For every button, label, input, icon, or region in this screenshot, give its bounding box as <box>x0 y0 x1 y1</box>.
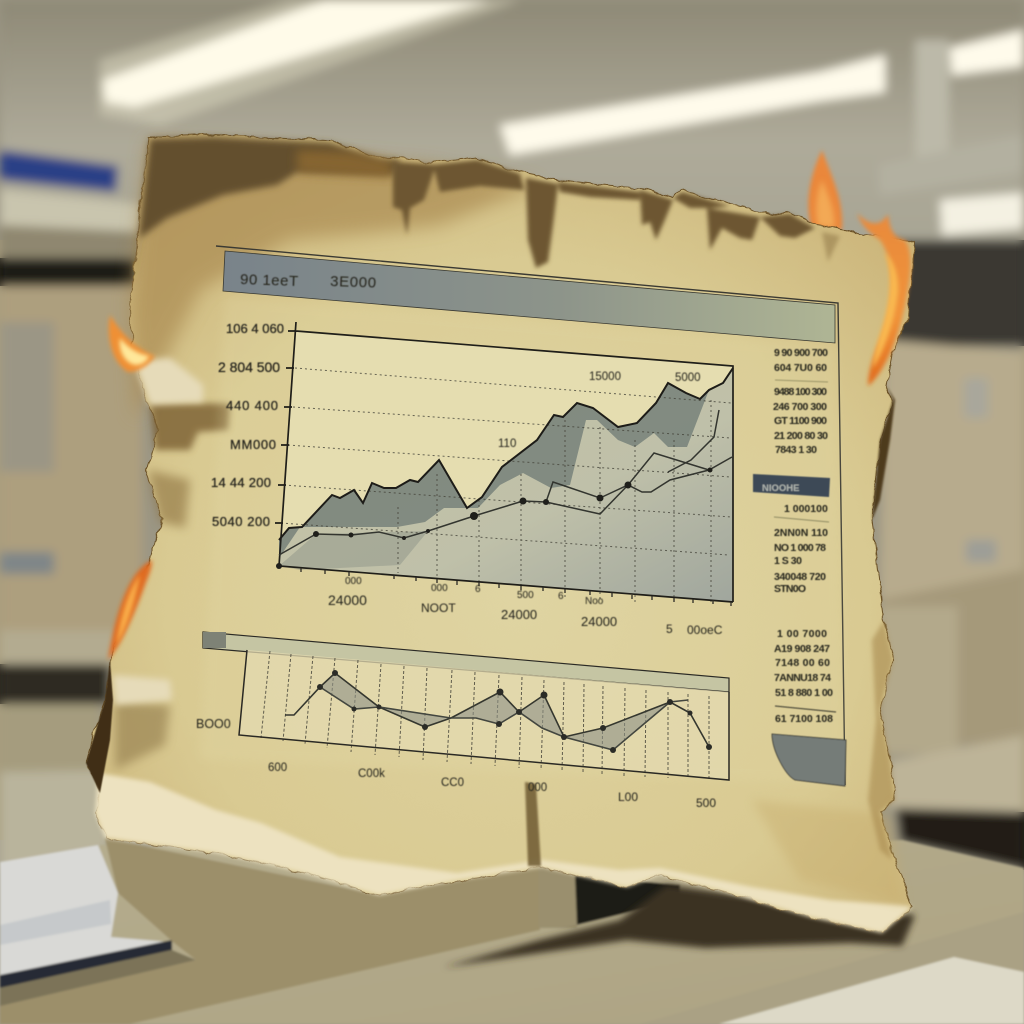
y axis labels: 5040 200 <box>212 514 270 529</box>
right text block 2: STN0O <box>774 583 806 595</box>
right column text <box>753 347 846 786</box>
vertical grid <box>261 651 709 780</box>
flame: right edge <box>857 213 910 386</box>
white worn patch lower left <box>113 675 172 705</box>
y axis labels <box>211 321 284 529</box>
right text block 2: NO 1 000 78 <box>774 542 826 554</box>
plot area fill <box>279 331 733 602</box>
y axis labels: 106 4 060 <box>226 321 284 336</box>
right text block 1: 246 700 300 <box>773 401 827 413</box>
box <box>539 866 577 928</box>
light area <box>279 368 733 602</box>
series lines <box>279 410 732 555</box>
lower dark band <box>279 531 428 570</box>
dark window <box>575 875 680 925</box>
right text block 2 <box>774 503 829 595</box>
right text block 1 <box>773 347 828 456</box>
x axis labels: Noo <box>585 596 604 607</box>
ridge outline <box>279 368 733 540</box>
lower chart labels: 600 <box>268 762 287 774</box>
sheet dark edge <box>0 940 172 988</box>
header text: 90 1eeT <box>240 271 298 290</box>
chart annotations <box>498 371 701 450</box>
data points <box>276 468 712 569</box>
bottom right shade <box>752 800 905 905</box>
white sheet right <box>719 957 1024 1024</box>
shelf left <box>0 190 145 232</box>
main area chart <box>211 321 733 637</box>
y axis labels: 14 44 200 <box>211 475 271 490</box>
axes <box>275 322 733 602</box>
char edge left bottom <box>86 660 113 793</box>
right text block 3: 7ANNU18 74 <box>774 672 831 684</box>
top drips <box>393 160 815 268</box>
lower chart labels: L00 <box>618 790 638 804</box>
desk right small <box>888 735 1024 812</box>
x axis labels: 000 <box>345 576 362 587</box>
lower chart labels: BOO0 <box>196 717 231 731</box>
white worn patch upper left <box>133 358 203 405</box>
cast shadow <box>444 885 915 967</box>
torn paper sheet <box>86 135 915 933</box>
scorch patches left <box>150 402 230 450</box>
ceiling lights <box>103 0 1024 235</box>
right text block 1: GT 1100 900 <box>774 415 827 427</box>
orange scorch <box>297 150 392 178</box>
desk front edge <box>640 912 1024 1024</box>
lower chart labels: CC0 <box>441 777 464 789</box>
dark label badge <box>753 474 830 497</box>
faint edge drips <box>822 232 840 262</box>
series A <box>285 673 709 747</box>
right text block 3 <box>774 628 836 725</box>
cabinet left <box>0 286 142 630</box>
ceiling <box>0 0 1024 240</box>
bottom tear stain <box>525 782 541 866</box>
lower chart labels <box>196 717 716 810</box>
cabinet right <box>880 340 1024 600</box>
y axis labels: 440 400 <box>226 398 278 413</box>
scorch edge right <box>868 620 895 860</box>
x axis labels: 24000 <box>581 614 617 629</box>
desk left <box>0 770 110 870</box>
dark scorch <box>133 137 400 290</box>
flame: left upper <box>109 315 155 372</box>
ceiling beam right <box>915 40 949 160</box>
chart annotations: 5000 <box>675 372 701 384</box>
right text block 2: 1 000100 <box>784 503 828 515</box>
chart annotations: 110 <box>498 438 516 450</box>
x axis labels: 5 <box>666 622 673 636</box>
right text block 3: 51 8 880 1 00 <box>775 687 833 699</box>
points <box>317 670 712 753</box>
right text block 2: 340048 720 <box>774 571 826 583</box>
x axis labels: 500 <box>517 590 534 601</box>
plot background <box>239 650 729 780</box>
tan scorch zone <box>130 140 540 420</box>
series B <box>320 687 688 750</box>
x axis labels: 000 <box>431 583 448 594</box>
desk surface <box>0 838 1024 1024</box>
header bar <box>223 251 835 343</box>
dark label badge: NIOOHE <box>762 483 799 494</box>
rough sheet outline <box>86 135 915 933</box>
dark under sheet <box>0 950 196 1008</box>
right text block 1: 9488 100 300 <box>774 386 827 398</box>
right text block 3: 61 7100 108 <box>775 713 833 725</box>
chart annotations: 15000 <box>589 371 621 383</box>
flame: left lower <box>108 560 152 660</box>
x axis labels: NOOT <box>421 601 456 615</box>
x ticks <box>301 568 731 606</box>
char edge right <box>872 385 895 520</box>
right text block 2: 2NN0N 110 <box>774 527 828 539</box>
title swatch <box>203 632 226 648</box>
lower line chart <box>196 632 729 810</box>
y axis labels: 2 804 500 <box>218 359 280 375</box>
x axis labels <box>328 576 723 637</box>
right text block 3: 7148 00 60 <box>775 657 830 669</box>
shaded band <box>320 673 670 750</box>
tan board behind paper <box>0 838 540 1024</box>
x axis labels: 24000 <box>328 592 367 608</box>
blue sign left <box>0 150 118 192</box>
y axis labels: MM000 <box>230 437 276 452</box>
x axis labels: 6 <box>558 591 564 602</box>
right text block 3: A19 908 247 <box>774 643 830 655</box>
right text block 1: 9 90 900 700 <box>774 347 828 359</box>
grey corner box <box>772 734 846 786</box>
right text block 2: 1 S 30 <box>774 555 802 567</box>
white sheet left <box>0 845 170 977</box>
document lighter panel <box>200 296 845 785</box>
lower chart labels: C00k <box>358 768 385 780</box>
dark ridge layer <box>279 383 709 558</box>
dark right back <box>880 240 1024 346</box>
chart title bar <box>203 632 729 692</box>
axes <box>239 650 729 780</box>
header bar: 3E000 <box>330 273 376 292</box>
gridlines <box>281 368 731 605</box>
document frame lines <box>216 246 845 785</box>
x axis labels: 00oeC <box>687 623 723 637</box>
right text block 3: 1 00 7000 <box>777 628 827 640</box>
x axis labels: 6 <box>475 584 481 595</box>
lower chart labels: 000 <box>528 782 547 794</box>
ceiling glow <box>100 0 520 125</box>
sheet print <box>0 900 111 945</box>
x axis labels: 24000 <box>501 607 537 622</box>
flame: top right back <box>808 150 842 230</box>
worn bottom edge <box>95 773 912 933</box>
right text block 1: 7843 1 30 <box>775 444 817 456</box>
right text block 1: 604 7U0 60 <box>774 362 827 374</box>
right text block 1: 21 200 80 30 <box>774 430 828 442</box>
lower chart labels: 500 <box>696 796 716 810</box>
